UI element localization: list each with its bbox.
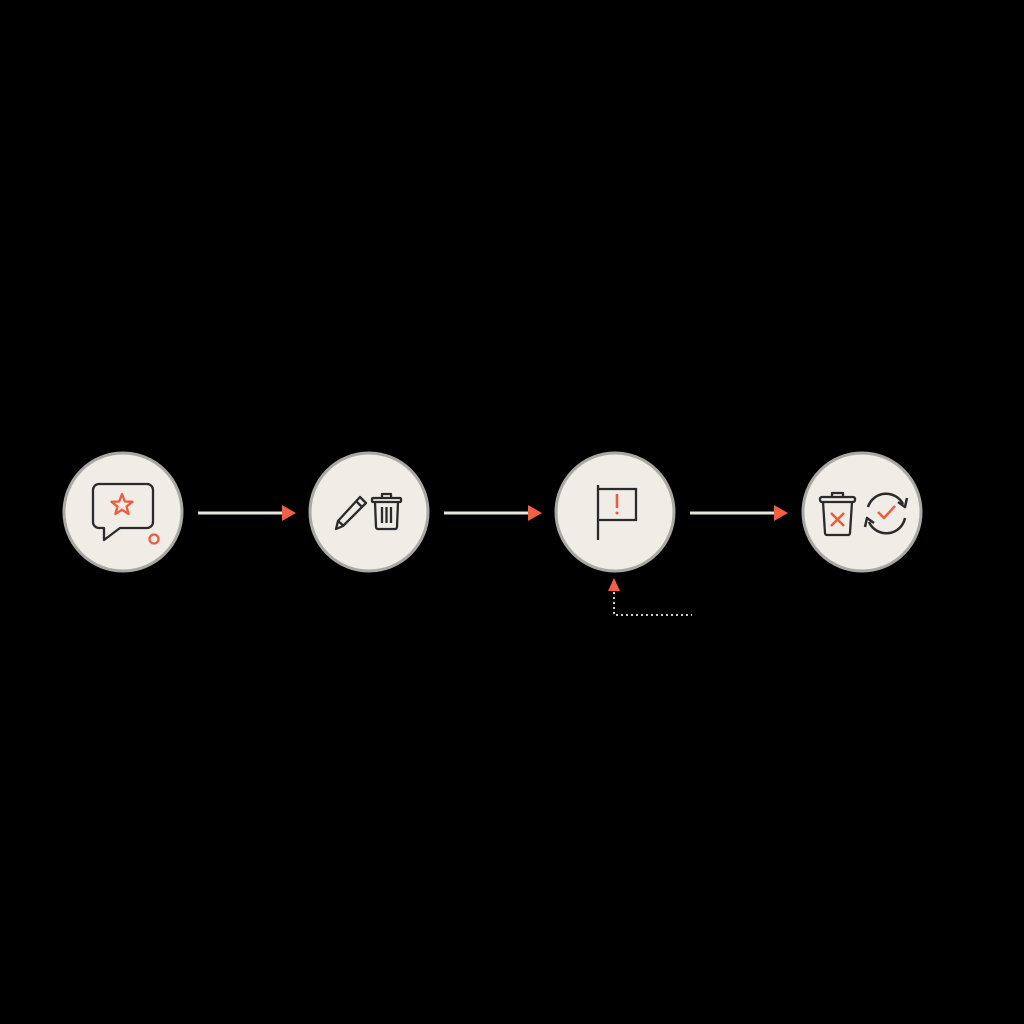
icon: trash with x xyxy=(820,493,855,535)
dotted feedback arrow xyxy=(608,578,692,615)
icon: chat bubble with star xyxy=(93,484,158,544)
step 1: feedback bubble xyxy=(64,453,182,571)
arrow 3 xyxy=(690,505,788,521)
arrow 2 xyxy=(444,505,542,521)
step 4: delete / restore xyxy=(803,453,921,571)
step 2: edit / delete xyxy=(310,453,428,571)
arrow 1 xyxy=(198,505,296,521)
icon: flag with exclamation xyxy=(598,485,636,540)
icon: sync with check xyxy=(865,494,907,533)
step 3: flag xyxy=(556,453,674,571)
icon: trash xyxy=(372,494,401,529)
icon: pencil xyxy=(336,497,366,529)
